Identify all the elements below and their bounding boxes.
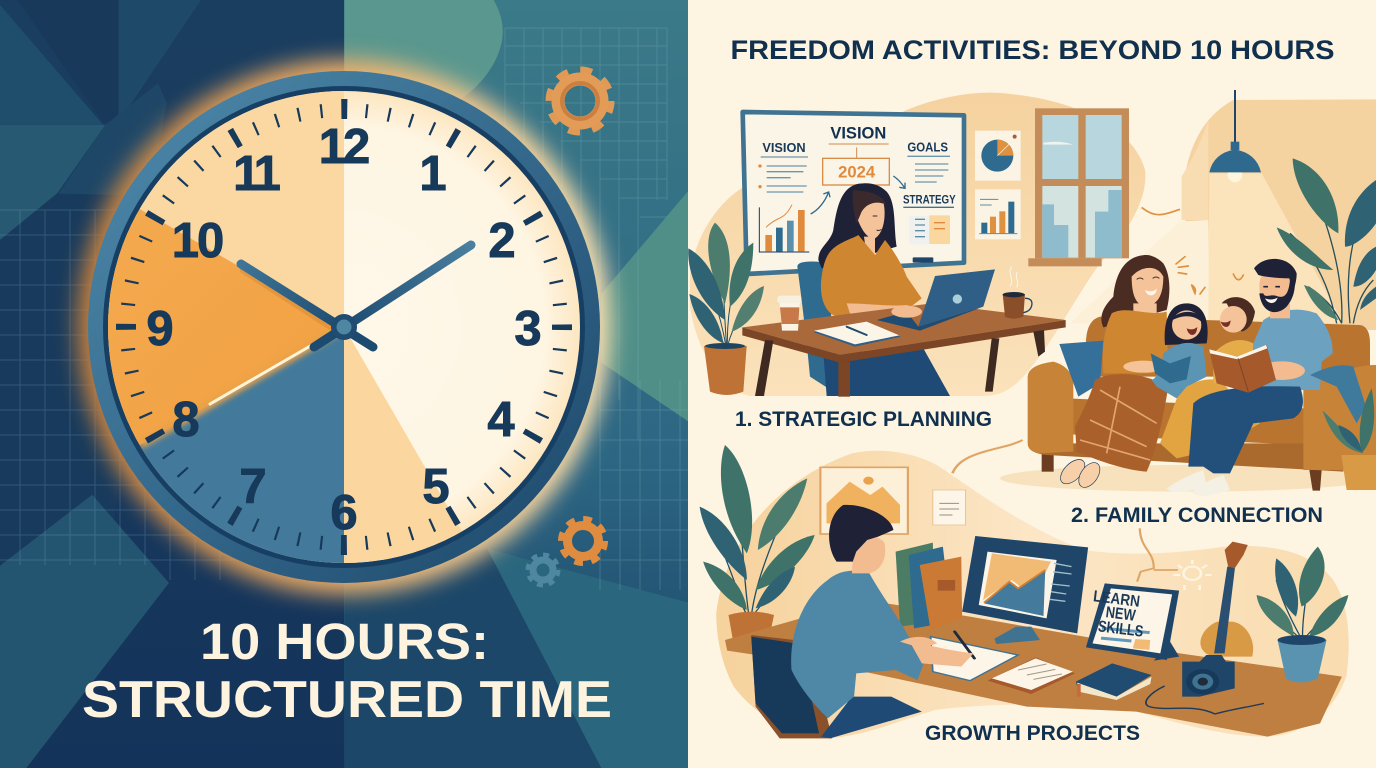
big plant <box>1277 158 1376 323</box>
clock numerals: 7 <box>239 460 267 514</box>
father <box>1167 259 1333 496</box>
lightbulb accent <box>1173 560 1212 590</box>
clock numerals: 8 <box>172 393 200 447</box>
notebook and pen <box>931 632 1018 681</box>
monitor <box>962 536 1088 644</box>
geometric background shapes <box>0 0 688 768</box>
window <box>1028 108 1129 266</box>
scene: growth projects <box>700 440 1349 738</box>
framed picture <box>820 467 908 534</box>
blue throw <box>1310 365 1366 423</box>
laptop <box>877 269 995 331</box>
panel: freedom activities (right) <box>688 0 1376 768</box>
title: 10 hours structured time: 10 HOURS: <box>200 613 489 670</box>
whiteboard: GOALS <box>907 140 948 155</box>
desk <box>725 600 1342 737</box>
open book <box>988 657 1075 694</box>
plant left <box>700 445 815 640</box>
clock hands <box>241 245 471 347</box>
text: learn new skills <box>1092 588 1144 641</box>
sticky note <box>933 490 966 525</box>
title: 10 hours structured time: STRUCTURED TIME <box>82 671 612 729</box>
whiteboard: VISION <box>762 140 806 155</box>
clock minute ticks <box>127 110 561 544</box>
text: learn new skills: LEARN <box>1092 588 1141 611</box>
clock hour ticks <box>126 109 562 545</box>
woman <box>818 183 950 396</box>
notebook <box>813 322 901 347</box>
takeaway cup <box>777 296 801 331</box>
open book <box>1209 345 1276 393</box>
boy <box>1213 297 1255 383</box>
label: strategic planning: 1. STRATEGIC PLANNING <box>735 408 992 431</box>
plant <box>688 223 764 395</box>
mother <box>1056 255 1169 491</box>
label: growth projects: GROWTH PROJECTS <box>925 722 1140 745</box>
floor <box>1000 465 1373 492</box>
clock numerals: 2 <box>488 214 516 268</box>
whiteboard: 2024 <box>838 162 876 181</box>
coffee mug <box>1003 267 1032 319</box>
camera <box>1182 655 1235 697</box>
clock face <box>108 91 580 563</box>
whiteboard <box>743 112 964 274</box>
grid lines <box>505 28 688 590</box>
whiteboard: STRATEGY <box>903 192 956 206</box>
clock numerals: 5 <box>422 460 450 514</box>
tablet <box>1086 583 1179 661</box>
chair <box>751 635 832 738</box>
label: family connection: 2. FAMILY CONNECTION <box>1071 504 1323 527</box>
title: 10 hours structured time <box>84 623 610 718</box>
icon: large gear <box>550 71 610 131</box>
clock numerals: 4 <box>487 393 515 447</box>
icon: medium gear <box>562 520 604 562</box>
clock numerals: 9 <box>146 302 174 356</box>
cable <box>1146 686 1264 714</box>
wall charts <box>975 131 1021 239</box>
clock numerals: 11 <box>233 147 280 201</box>
clock <box>77 60 611 600</box>
panel: structured time (left) <box>0 0 688 768</box>
small plant and pot <box>1323 388 1376 490</box>
clock numerals: 12 <box>319 120 369 174</box>
clock numerals <box>146 120 542 540</box>
text: learn new skills: NEW <box>1105 604 1137 625</box>
lamp <box>1209 90 1261 182</box>
yellow blanket <box>1160 379 1260 458</box>
text: learn new skills: SKILLS <box>1097 618 1144 641</box>
icon: small gear <box>528 555 558 585</box>
scene: strategic planning <box>688 93 1145 397</box>
potted plant right <box>1257 547 1348 682</box>
scene: family connection <box>1000 90 1376 496</box>
whiteboard: VISION <box>830 124 886 143</box>
girl <box>1151 303 1208 398</box>
books <box>896 543 962 630</box>
clock numerals: 1 <box>419 147 447 201</box>
sofa <box>1028 317 1376 491</box>
man <box>791 505 974 738</box>
chair <box>797 262 890 396</box>
clock numerals: 6 <box>330 486 358 540</box>
desk <box>742 303 1066 397</box>
clock numerals: 3 <box>514 302 542 356</box>
sparkle accents <box>1176 257 1243 294</box>
heading: freedom activities: FREEDOM ACTIVITIES: BEYOND 10 HOURS <box>730 35 1334 65</box>
guitar <box>1200 542 1253 657</box>
closed book <box>1076 663 1152 700</box>
clock numerals: 10 <box>172 214 223 268</box>
